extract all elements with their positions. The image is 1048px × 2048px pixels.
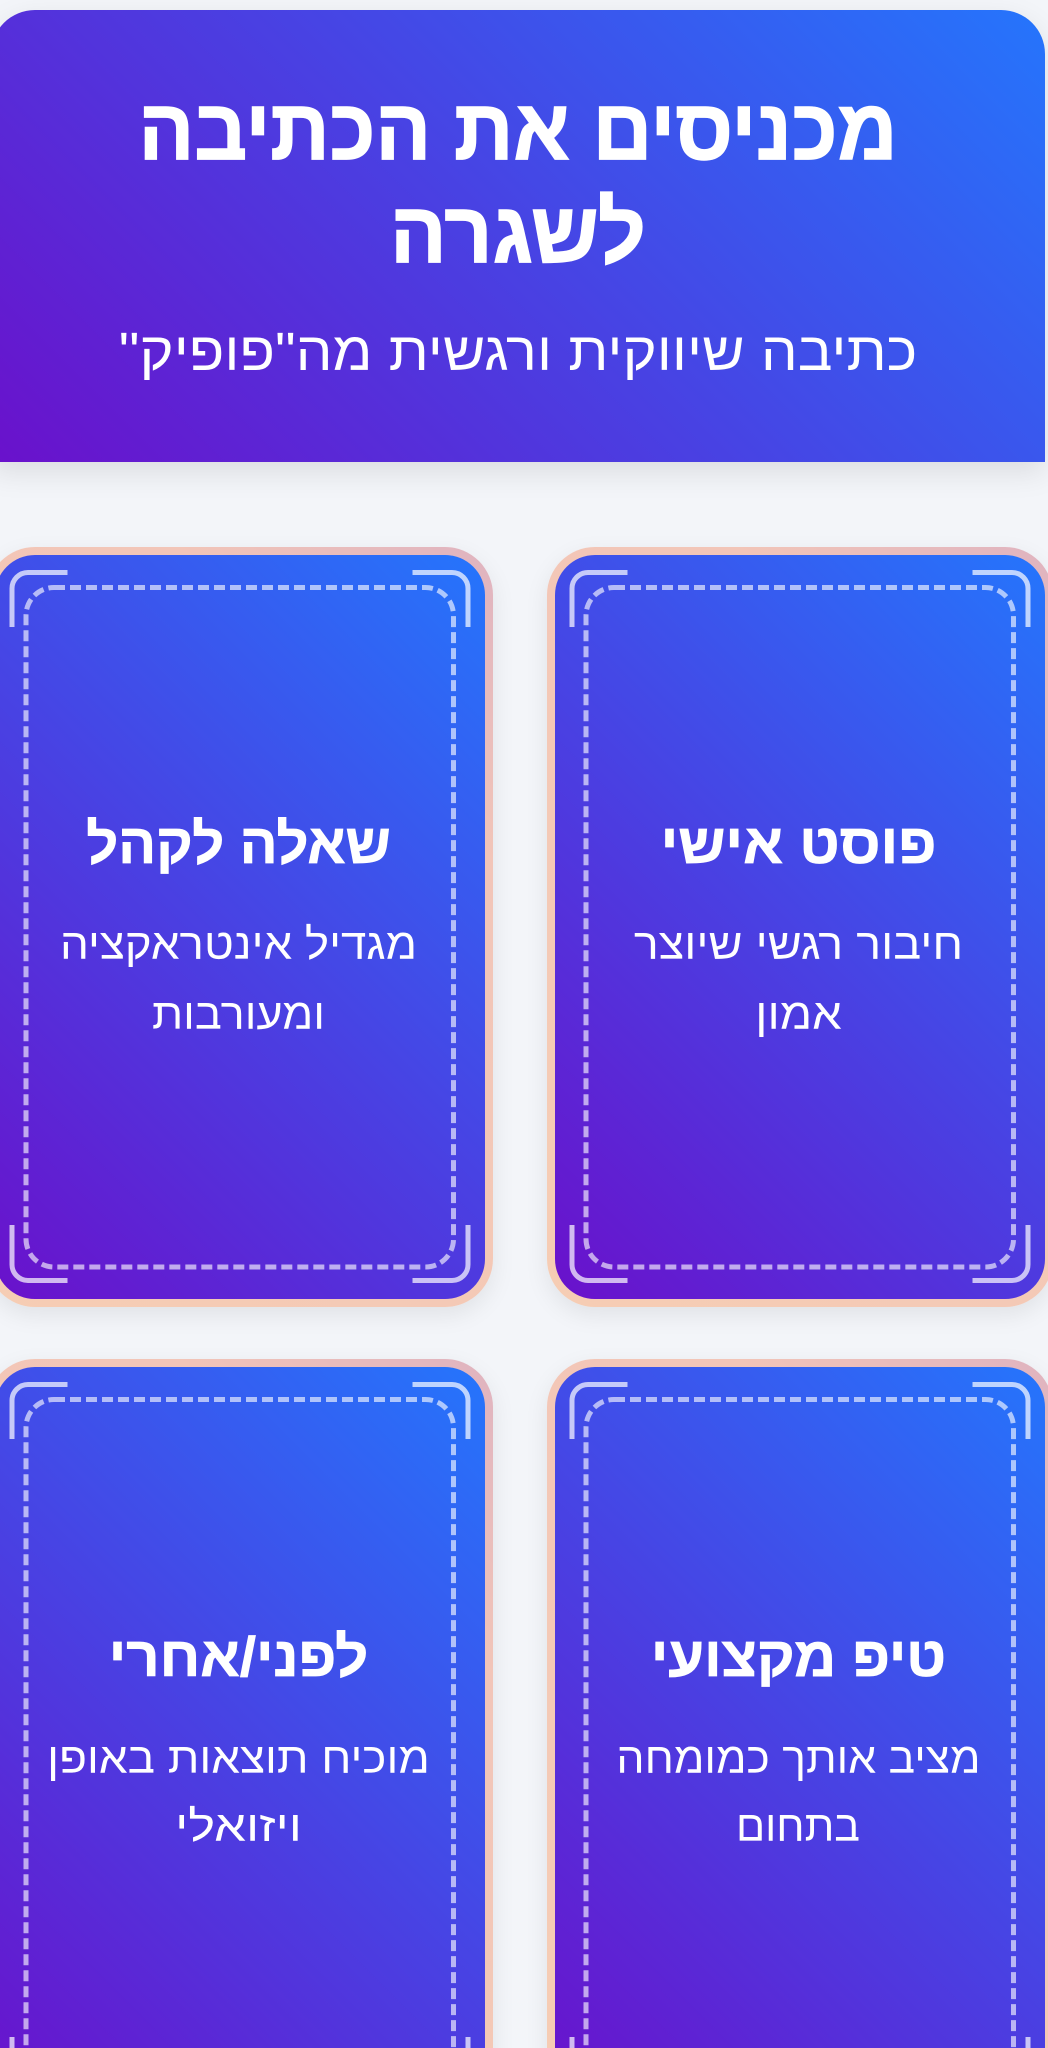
card description: מוכיח תוצאות באופן <box>47 1734 430 1782</box>
card heading: שאלה לקהל <box>86 812 391 874</box>
card heading: לפני/אחרי <box>109 1625 368 1688</box>
card description: בתחום <box>736 1802 860 1850</box>
card description: אמון <box>755 991 841 1039</box>
card description <box>47 1734 430 1850</box>
card description: ומעורבות <box>152 991 325 1039</box>
card description: מציב אותך כמומחה <box>616 1734 980 1782</box>
card description: מגדיל אינטראקציה <box>60 921 417 969</box>
decorative frame: corner brackets and dashed outline <box>570 1382 1030 2048</box>
title: מכניסים את הכתיבה <box>139 82 897 178</box>
card text <box>633 812 963 1039</box>
card description <box>633 921 963 1039</box>
card description <box>60 921 417 1039</box>
header banner <box>0 10 1045 462</box>
card description: ויזואלי <box>175 1802 302 1850</box>
decorative frame: corner brackets and dashed outline <box>570 570 1030 1283</box>
title: לשגרה <box>390 185 646 281</box>
card heading: פוסט אישי <box>660 812 936 874</box>
card text <box>616 1625 980 1850</box>
card heading: טיפ מקצועי <box>650 1625 946 1688</box>
panel: personal post <box>546 547 1048 1307</box>
panel: audience question <box>0 547 493 1307</box>
card text <box>60 812 417 1039</box>
panel: before and after <box>0 1359 493 2048</box>
panel: professional tip <box>546 1359 1048 2048</box>
title <box>139 82 897 281</box>
card text <box>47 1625 430 1850</box>
card description: חיבור רגשי שיוצר <box>633 921 963 969</box>
decorative frame: corner brackets and dashed outline <box>10 570 470 1283</box>
card description <box>616 1734 980 1850</box>
subtitle: כתיבה שיווקית ורגשית מה"פופיק" <box>119 322 917 382</box>
decorative frame: corner brackets and dashed outline <box>10 1382 470 2048</box>
